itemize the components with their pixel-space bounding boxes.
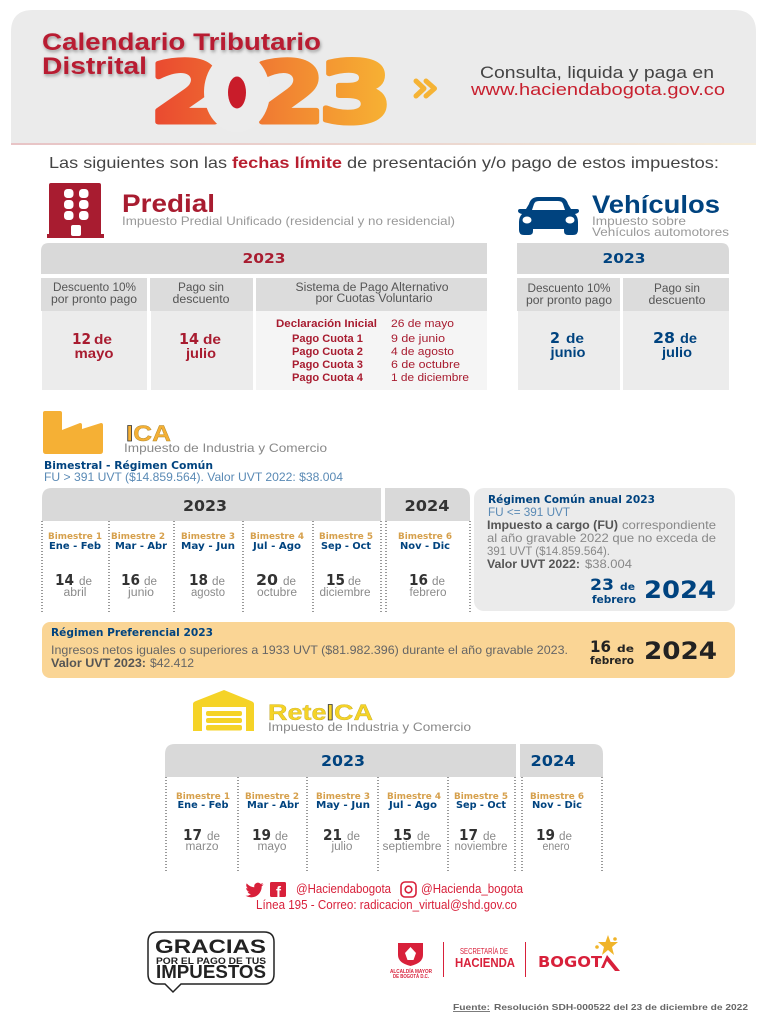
bimestre 4 — [250, 532, 304, 599]
panel: Régimen Preferencial — [42, 622, 735, 678]
instagram handle: @Hacienda_bogota — [421, 882, 523, 896]
icon: factory — [43, 411, 103, 454]
bimestre 6: febrero — [410, 587, 446, 599]
column: sistema alternativo — [276, 282, 469, 384]
bimestre 6: de — [432, 576, 445, 588]
heading: Vehículos: Vehículos — [592, 191, 720, 219]
column: descuento: Descuento 10% — [53, 282, 136, 294]
bimestre 4: 20 — [256, 571, 278, 589]
bimestre 1: 17 — [183, 826, 202, 844]
bimestre 6: Bimestre 6 — [530, 792, 584, 802]
icon: facebook — [270, 882, 286, 901]
bimestre 2: Bimestre 2 — [111, 532, 165, 542]
heading: ICA: Impuesto de Industria y Comercio — [124, 441, 327, 455]
bimestre 5: 17 — [459, 826, 478, 844]
heading: Predial — [122, 190, 455, 228]
bimestre 1: Bimestre 1 — [48, 532, 102, 542]
column: descuento vehículos: por pronto pago — [526, 295, 612, 307]
bimestre 1: marzo — [186, 841, 218, 853]
bimestre 1: de — [79, 576, 92, 588]
column: sistema alternativo: Pago Cuota 3 — [292, 359, 363, 371]
bimestre 3: May - Jun — [316, 800, 370, 811]
bimestre 3: de — [212, 576, 225, 588]
column: sistema alternativo: 6 de octubre — [391, 359, 460, 371]
bimestre 5: 15 — [326, 571, 345, 589]
source note: Resolución SDH-000522 del 23 de diciembre de 2022 — [494, 1002, 748, 1012]
column: pago sin descuento — [172, 282, 230, 361]
panel: Vehículos table — [517, 243, 729, 390]
logo: Alcaldía Mayor: ALCALDÍA MAYOR — [390, 967, 432, 975]
panel: ReteICA calendar: 2024 — [530, 752, 576, 770]
heading: Vehículos: Impuesto sobre — [592, 214, 686, 228]
column: descuento — [51, 282, 137, 361]
panel: Régimen Preferencial: $42.412 — [150, 656, 194, 670]
speech bubble: gracias: POR EL PAGO DE TUS — [156, 956, 266, 967]
big year 2023 — [150, 44, 392, 142]
heading: ICA — [124, 421, 327, 455]
bimestre 5: diciembre — [320, 587, 370, 599]
bimestre 5 — [319, 532, 373, 599]
bimestre 4: Bimestre 4 — [387, 792, 441, 802]
bimestre 3 — [316, 792, 370, 853]
consult text — [470, 64, 725, 99]
bimestre 6: 16 — [409, 571, 428, 589]
panel: ICA calendar — [42, 488, 470, 614]
panel: Predial table — [41, 243, 487, 390]
bimestre 6 — [398, 532, 452, 599]
bimestre 2: de — [144, 576, 157, 588]
column: descuento: de — [94, 332, 113, 347]
heading: ReteICA: Rete ICA — [268, 700, 373, 725]
bimestre 2 — [111, 532, 167, 599]
column: descuento: por pronto pago — [51, 294, 137, 306]
date 23 febrero 2024 — [590, 575, 716, 606]
column: pago sin descuento vehículos — [648, 283, 706, 360]
panel: Régimen Preferencial: Valor UVT 2023: — [51, 656, 146, 670]
consult text: www.haciendabogota.gov.co — [470, 81, 725, 99]
bimestre 5: Bimestre 5 — [454, 792, 508, 802]
date 16 febrero 2024: febrero — [590, 655, 634, 667]
ICA regime text — [44, 460, 343, 484]
bimestre 5: Sep - Oct — [456, 800, 506, 811]
bimestre 4: de — [417, 831, 430, 843]
icon: car — [518, 197, 579, 235]
bimestre 4: Jul - Ago — [388, 800, 438, 811]
icon: twitter — [246, 883, 264, 897]
speech bubble: gracias: GRACIAS — [155, 937, 266, 958]
column: descuento vehículos — [526, 283, 612, 360]
bimestre 5: de — [348, 576, 361, 588]
date 23 febrero 2024: de — [620, 582, 635, 593]
panel: Régimen Común anual: correspondiente — [622, 518, 716, 532]
bimestre 1: Ene - Feb — [49, 541, 101, 552]
panel: Régimen Preferencial: Ingresos netos iguales o superiores a 1933 UVT ($81.982.396) durante el año gravable 2023. — [51, 643, 568, 657]
heading: ReteICA: Impuesto de Industria y Comercio — [268, 720, 471, 734]
bimestre 1 — [48, 532, 102, 599]
column: sistema alternativo: Pago Cuota 1 — [292, 333, 363, 345]
bimestre 2: Bimestre 2 — [245, 792, 299, 802]
heading: Predial: Predial — [122, 190, 215, 218]
panel: Régimen Común anual: FU <= 391 UVT — [488, 505, 571, 519]
date 16 febrero 2024: 16 — [590, 637, 611, 656]
bimestre 1: de — [207, 831, 220, 843]
logo: Secretaría de Hacienda: HACIENDA — [455, 955, 516, 970]
intro sentence: Las siguientes son las — [49, 155, 227, 172]
big year 2023: 2 — [254, 44, 325, 142]
column: pago sin descuento: 14 — [179, 330, 199, 348]
logo: Secretaría de Hacienda — [443, 942, 526, 977]
twitter handle: @Haciendabogota — [296, 882, 391, 896]
date 16 febrero 2024: de — [617, 644, 634, 655]
big year 2023: 3 — [319, 44, 392, 142]
bimestre 3: de — [347, 831, 360, 843]
column: sistema alternativo: Pago Cuota 2 — [292, 346, 363, 358]
bimestre 2: mayo — [258, 841, 286, 853]
bimestre 4: septiembre — [382, 841, 442, 853]
panel: Régimen Común anual: $38.004 — [585, 557, 632, 571]
bimestre 6: 19 — [536, 826, 555, 844]
bimestre 6: Bimestre 6 — [398, 532, 452, 542]
date 23 febrero 2024: 2024 — [644, 576, 716, 604]
logo: Bogotá — [538, 935, 620, 971]
bimestre 4: Jul - Ago — [252, 541, 302, 552]
bimestre 2: junio — [127, 587, 154, 599]
icon: building — [47, 183, 104, 238]
column: pago sin descuento vehículos: descuento — [648, 295, 706, 307]
column: sistema alternativo: Pago Cuota 4 — [292, 372, 364, 384]
panel: header banner — [11, 10, 756, 145]
bimestre 2: Mar - Abr — [247, 800, 299, 811]
icon: facebook: f — [276, 884, 282, 901]
panel: ReteICA calendar: 2023 — [321, 752, 365, 770]
column: sistema alternativo: Sistema de Pago Alternativo — [296, 282, 448, 294]
column: sistema alternativo: Declaración Inicial — [276, 318, 377, 330]
title — [42, 29, 321, 80]
bimestre 3: 18 — [189, 571, 208, 589]
bimestre 1 — [176, 792, 230, 853]
bimestre 3: Bimestre 3 — [181, 532, 235, 542]
bimestre 4: 15 — [393, 826, 412, 844]
bimestre 5: Bimestre 5 — [319, 532, 373, 542]
heading: Vehículos: Vehículos automotores — [592, 225, 729, 239]
speech bubble: gracias: IMPUESTOS — [156, 962, 266, 982]
column: sistema alternativo: 26 de mayo — [391, 318, 454, 330]
panel: ReteICA calendar — [165, 744, 603, 872]
consult text: Consulta, liquida y paga en — [480, 64, 714, 82]
ICA regime text: Bimestral - Régimen Común — [44, 460, 213, 472]
column: pago sin descuento vehículos: julio — [661, 345, 692, 360]
column: descuento vehículos: junio — [549, 345, 586, 360]
panel: Régimen Común anual: Impuesto a cargo (FU) — [487, 518, 618, 532]
ICA regime text: FU > 391 UVT ($14.859.564). Valor UVT 2022: $38.004 — [44, 470, 343, 484]
bimestre 5: noviembre — [454, 841, 508, 853]
column: sistema alternativo: 4 de agosto — [391, 346, 454, 358]
bimestre 6: enero — [542, 841, 570, 853]
bimestre 3 — [181, 532, 235, 599]
panel: ICA calendar: 2023 — [183, 497, 227, 515]
bimestre 5 — [454, 792, 508, 853]
column: pago sin descuento vehículos: Pago sin — [654, 283, 700, 295]
column: pago sin descuento: Pago sin — [178, 282, 224, 294]
bimestre 1: Ene - Feb — [178, 800, 229, 811]
bimestre 1: 14 — [55, 571, 74, 589]
bimestre 6: de — [559, 831, 572, 843]
icon: warehouse — [193, 690, 254, 731]
heading: ReteICA — [268, 700, 471, 734]
column: sistema alternativo: 9 de junio — [391, 333, 445, 345]
panel: Predial table: 2023 — [242, 251, 286, 267]
bimestre 3: agosto — [191, 587, 225, 599]
column: pago sin descuento vehículos: de — [680, 331, 698, 346]
column: descuento: 12 — [72, 330, 91, 348]
date 16 febrero 2024 — [590, 637, 717, 667]
panel: ICA calendar: 2024 — [404, 497, 450, 515]
panel: Régimen Común anual: 391 UVT ($14.859.564). — [487, 544, 610, 558]
bimestre 2 — [245, 792, 299, 853]
bimestre 4: de — [283, 576, 296, 588]
date 23 febrero 2024: 23 — [590, 575, 614, 594]
panel: Régimen Preferencial: Régimen Preferencial 2023 — [51, 627, 213, 639]
heading: ICA: ICA — [126, 421, 171, 446]
bimestre 3: julio — [330, 841, 352, 853]
bimestre 6: Nov - Dic — [400, 541, 450, 552]
logo: Alcaldía Mayor: DE BOGOTÁ D.C. — [393, 973, 429, 980]
column: descuento vehículos: 2 — [550, 329, 560, 347]
column: pago sin descuento vehículos: 28 — [653, 329, 675, 347]
column: descuento vehículos: de — [566, 331, 585, 346]
bimestre 3: May - Jun — [181, 541, 235, 552]
icon: double chevron arrow — [416, 81, 434, 96]
bimestre 6: Nov - Dic — [532, 800, 582, 811]
column: pago sin descuento: julio — [185, 346, 216, 361]
heading: Predial: Impuesto Predial Unificado (residencial y no residencial) — [122, 214, 455, 228]
bimestre 2: 16 — [121, 571, 140, 589]
column: pago sin descuento: de — [203, 332, 222, 347]
contact line: Línea 195 - Correo: radicacion_virtual@shd.gov.co — [256, 898, 517, 912]
intro sentence: de presentación y/o pago de estos impuestos: — [347, 155, 719, 172]
bimestre 2: de — [275, 831, 288, 843]
bimestre 4: octubre — [257, 587, 297, 599]
bimestre 3: 21 — [323, 826, 342, 844]
intro sentence — [49, 155, 719, 172]
bimestre 5: de — [483, 831, 496, 843]
intro sentence: fechas límite — [232, 155, 342, 172]
bimestre 1: Bimestre 1 — [176, 792, 230, 802]
column: pago sin descuento: descuento — [172, 294, 230, 306]
title: Distrital — [42, 53, 147, 80]
social and contact — [246, 882, 523, 912]
column: sistema alternativo: 1 de diciembre — [391, 372, 469, 384]
panel: Vehículos table: 2023 — [602, 251, 646, 267]
date 23 febrero 2024: febrero — [592, 594, 636, 606]
date 16 febrero 2024: 2024 — [644, 637, 717, 665]
bimestre 4 — [382, 792, 442, 853]
logo: Secretaría de Hacienda: SECRETARÍA DE — [460, 947, 508, 956]
bimestre 6 — [530, 792, 584, 853]
source note: Fuente: — [453, 1002, 490, 1012]
bimestre 4: Bimestre 4 — [250, 532, 304, 542]
column: descuento vehículos: Descuento 10% — [528, 283, 610, 295]
title: Calendario Tributario — [42, 29, 321, 56]
bimestre 3: Bimestre 3 — [316, 792, 370, 802]
panel: Régimen Común anual: Valor UVT 2022: — [487, 557, 580, 571]
icon: instagram — [401, 882, 416, 897]
bimestre 5: Sep - Oct — [321, 541, 371, 552]
bimestre 2: 19 — [252, 826, 271, 844]
panel: Régimen Común anual: al año gravable 2022 que no exceda de — [487, 531, 716, 545]
bimestre 1: abril — [64, 587, 86, 599]
big year 2023: 2 — [150, 44, 224, 142]
logo: Bogotá: BOGOT — [538, 953, 603, 971]
column: sistema alternativo: por Cuotas Voluntario — [316, 293, 432, 305]
column: descuento: mayo — [74, 346, 114, 361]
heading: Vehículos — [592, 191, 729, 239]
panel: Régimen Común anual: Régimen Común anual 2023 — [488, 494, 655, 506]
panel: Régimen Común anual — [474, 488, 735, 611]
speech bubble: gracias — [148, 932, 274, 992]
bimestre 2: Mar - Abr — [115, 541, 167, 552]
logo: Alcaldía Mayor — [390, 943, 432, 980]
